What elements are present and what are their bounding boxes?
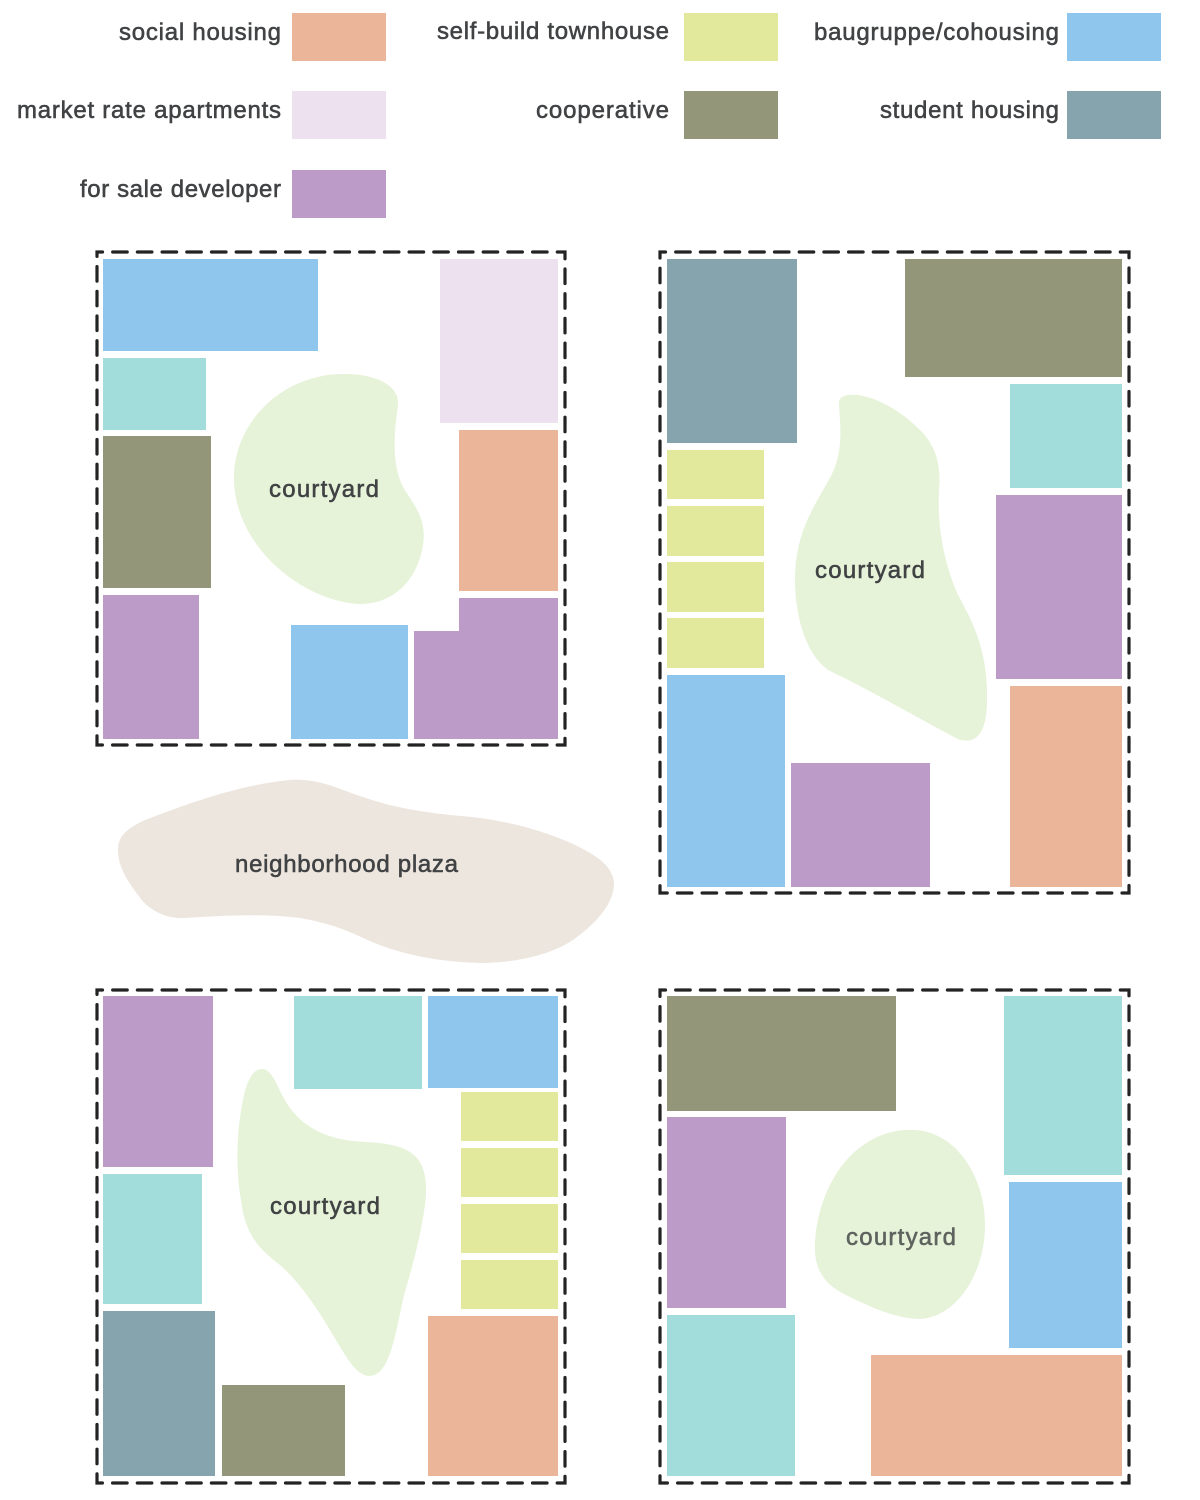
cooperative building	[905, 259, 1122, 377]
social housing building	[871, 1355, 1122, 1476]
cooperative building	[667, 996, 896, 1111]
courtyard	[815, 1130, 985, 1319]
block: top right	[660, 252, 1129, 893]
market rate building	[440, 259, 558, 423]
legend: baugruppe/cohousing	[814, 13, 1161, 61]
baugruppe building	[1009, 1182, 1122, 1348]
courtyard: courtyard	[846, 1224, 956, 1251]
teal building 2	[294, 996, 422, 1089]
neighborhood plaza: neighborhood plaza	[235, 851, 459, 878]
legend: self-build townhouse: self-build townhouse	[437, 18, 669, 45]
legend: social housing: social housing	[119, 19, 281, 46]
legend: market rate apartments: market rate apartments	[17, 97, 281, 124]
for sale building	[103, 996, 213, 1167]
baugruppe building	[667, 675, 785, 887]
teal building	[1010, 384, 1122, 488]
courtyard: courtyard	[815, 557, 925, 584]
teal building	[103, 358, 206, 430]
site boundary	[660, 252, 1129, 893]
teal building	[667, 1315, 795, 1476]
courtyard	[234, 374, 424, 604]
student housing building	[103, 1311, 215, 1476]
site boundary	[97, 990, 565, 1483]
courtyard: courtyard	[270, 1193, 380, 1220]
courtyard: courtyard	[269, 476, 379, 503]
neighborhood plaza	[118, 780, 614, 963]
for sale building	[103, 595, 199, 739]
legend: student housing: student housing	[880, 97, 1059, 124]
site boundary	[660, 990, 1129, 1483]
cooperative building	[103, 436, 211, 588]
legend: baugruppe/cohousing: baugruppe/cohousing	[814, 19, 1059, 46]
legend: cooperative: cooperative	[536, 97, 669, 124]
social housing building	[459, 430, 558, 591]
block: bottom right	[660, 990, 1129, 1483]
for sale building	[667, 1117, 786, 1308]
baugruppe building	[103, 259, 318, 351]
block: top left	[97, 252, 565, 745]
for sale L-shaped building	[414, 598, 558, 739]
for sale building	[996, 495, 1122, 679]
baugruppe building 2	[291, 625, 408, 739]
for sale building 2	[791, 763, 930, 887]
legend: for sale developer	[80, 170, 386, 218]
block: bottom left	[97, 990, 565, 1483]
townhouses	[461, 1092, 558, 1309]
legend	[17, 13, 1161, 218]
townhouses	[667, 450, 764, 668]
legend: student housing	[880, 91, 1161, 139]
site boundary	[97, 252, 565, 745]
legend: market rate apartments	[17, 91, 386, 139]
teal building 2	[1004, 996, 1122, 1175]
legend: cooperative	[536, 91, 778, 139]
courtyard	[795, 395, 987, 741]
social housing building	[1010, 686, 1122, 887]
cooperative building	[222, 1385, 345, 1476]
courtyard	[237, 1069, 426, 1376]
student housing building	[667, 259, 797, 443]
legend: social housing	[119, 13, 386, 61]
social housing building	[428, 1316, 558, 1476]
teal building	[103, 1174, 202, 1304]
legend: self-build townhouse	[437, 13, 778, 61]
legend: for sale developer: for sale developer	[80, 176, 281, 203]
baugruppe building	[428, 996, 558, 1088]
